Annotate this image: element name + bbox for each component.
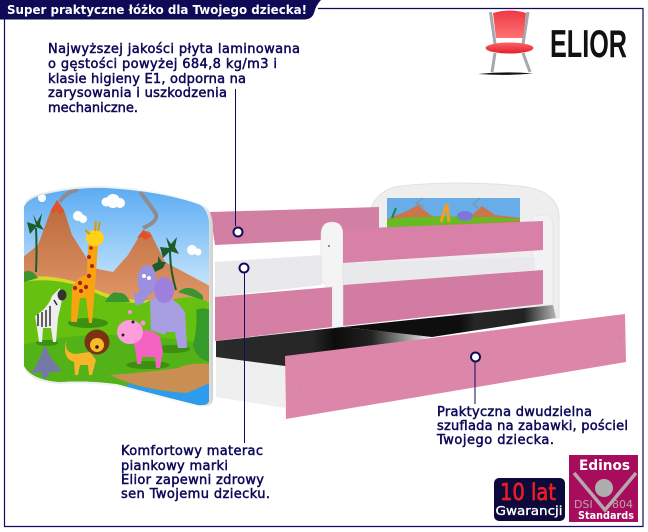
badge: Edinos standards: DSI [574, 498, 593, 511]
drawer front [285, 314, 626, 419]
lion [65, 330, 110, 375]
text block: mattress: Komfortowy materac [121, 444, 263, 459]
dark underbed right [343, 305, 556, 337]
side panel with safari print [20, 185, 215, 410]
text block: drawer: Twojego dziecka. [436, 433, 554, 448]
volcanoes [22, 200, 210, 310]
base [216, 355, 285, 408]
elephant [133, 265, 190, 353]
text block: drawer: szuflada na zabawki, pościel [437, 419, 628, 434]
text block: mattress: piankowy marki [121, 459, 228, 474]
headboard [370, 183, 559, 318]
bed illustration [210, 183, 626, 419]
dark underbed left [216, 327, 432, 366]
text block: board: zarysowania i uszkodzenia [48, 86, 227, 101]
sand [110, 364, 212, 393]
text block: board: Najwyższej jakości płyta laminowana [48, 42, 300, 57]
water [127, 383, 209, 406]
text block: board [48, 42, 300, 116]
mattress left [215, 255, 322, 297]
badge: Edinos standards [569, 455, 638, 522]
middle post [321, 222, 343, 328]
marker [471, 352, 480, 362]
giraffe [68, 221, 108, 328]
badge: 10 year warranty [494, 478, 565, 521]
lower pink panel left [215, 287, 332, 341]
drawer screws [299, 386, 301, 388]
front rail [343, 221, 543, 263]
text block: mattress: Elior zapewni zdrowy [121, 473, 264, 488]
text block: board: mechaniczne. [48, 101, 138, 116]
callout line: board [234, 89, 242, 236]
hippo [117, 310, 170, 369]
title banner: Super praktyczne łóżko dla Twojego dziecka! [7, 2, 307, 17]
right post [532, 215, 553, 305]
safari scene [20, 185, 215, 410]
zebra [35, 288, 66, 346]
text block: drawer: Praktyczna dwudzielna [437, 405, 592, 420]
headboard picture [387, 198, 520, 228]
flower [31, 345, 62, 380]
palms [27, 213, 179, 290]
text block: board: klasie higieny E1, odporna na [48, 72, 246, 87]
callout line: drawer [471, 352, 480, 404]
logo: Elior chair [478, 10, 627, 75]
marker [234, 228, 242, 236]
badge: 10 year warranty: 10 lat [500, 480, 556, 506]
icon: red chair [478, 10, 534, 75]
badge: 10 year warranty: Gwarancji [496, 504, 562, 518]
marker [240, 264, 248, 272]
clouds [38, 194, 202, 256]
lower pink panel right [343, 270, 543, 326]
text block: board: o gęstości powyżej 684,8 kg/m3 i [48, 57, 277, 72]
text block: mattress [121, 444, 270, 502]
badge: Edinos standards: Standards [578, 509, 634, 522]
text block: drawer [436, 405, 628, 448]
panel edge [24, 186, 213, 407]
bushes [24, 271, 203, 302]
back rail [210, 207, 379, 245]
meadow [22, 277, 212, 410]
badge: Edinos standards: Edinos [579, 458, 630, 474]
badge: Edinos standards: 804 [612, 498, 633, 511]
text block: mattress: sen Twojemu dziecku. [121, 487, 270, 502]
mattress right [343, 257, 535, 286]
smoke [60, 190, 156, 228]
callout line: mattress [240, 264, 248, 443]
